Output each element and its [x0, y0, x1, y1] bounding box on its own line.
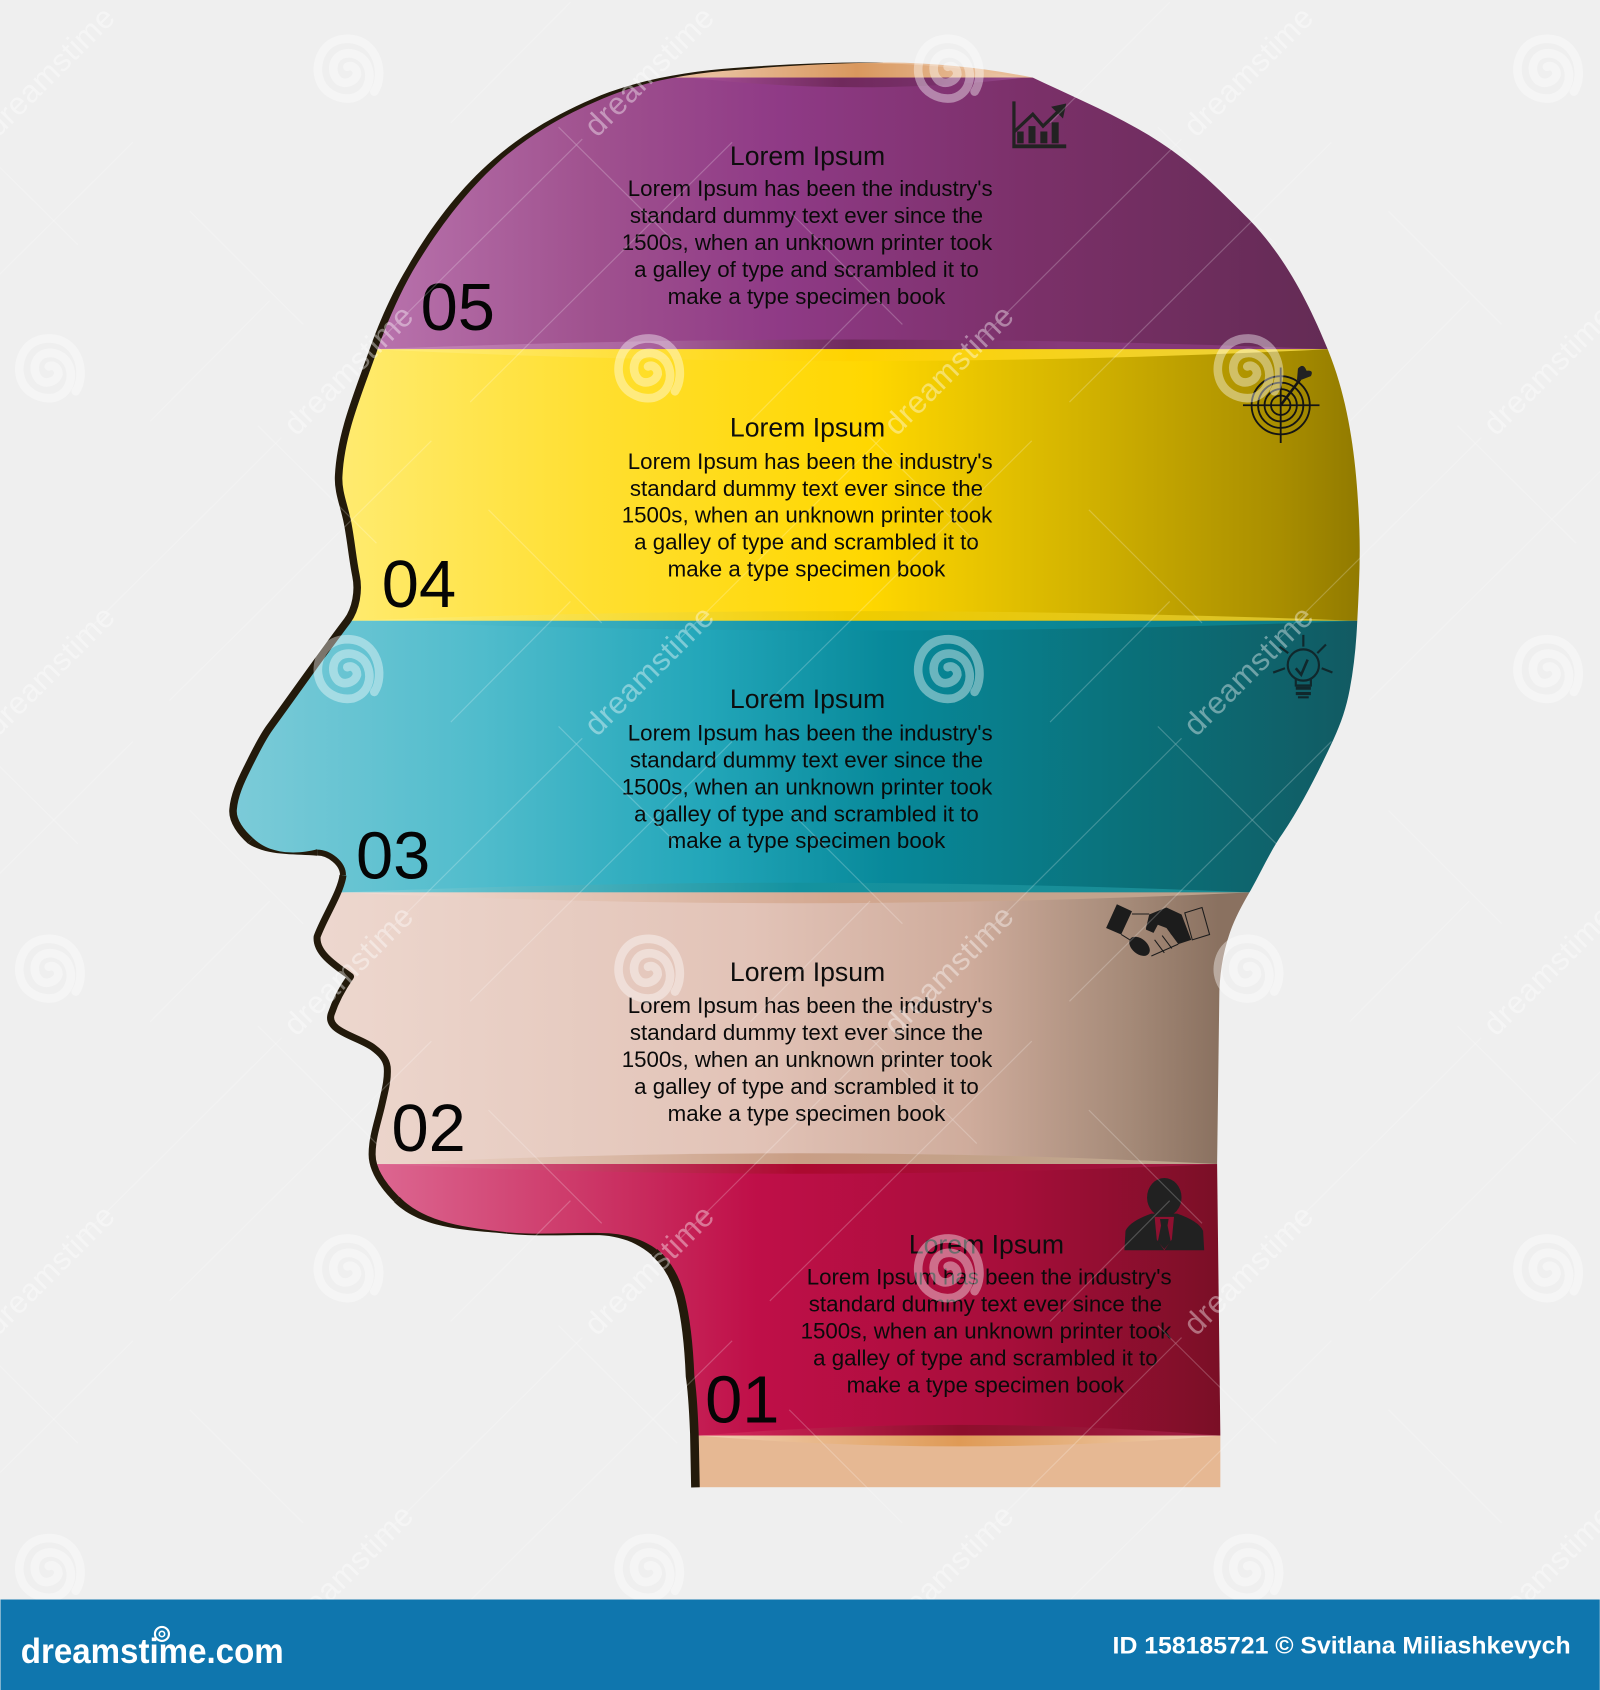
icon: businessman	[1124, 1178, 1204, 1250]
text block 04: standard dummy text ever since the	[630, 476, 983, 501]
footer bar	[0, 1599, 1600, 1690]
heading 02: Lorem Ipsum	[730, 957, 885, 987]
heading 03: Lorem Ipsum	[730, 684, 885, 714]
text block 02: standard dummy text ever since the	[630, 1020, 983, 1045]
text block 03: Lorem Ipsum has been the industry's	[628, 720, 993, 745]
panel: 05 purple band	[367, 78, 1337, 349]
head infographic	[231, 54, 1364, 1487]
icon: light bulb with check	[1273, 635, 1332, 698]
text block 04	[622, 449, 993, 582]
watermark layer: dreamstime	[577, 0, 721, 143]
text block 03	[622, 720, 993, 853]
watermark layer: dreamstime	[277, 298, 421, 442]
panel: 03 teal band	[231, 621, 1363, 893]
text block 03: 1500s, when an unknown printer took	[622, 774, 993, 799]
watermark layer: dreamstime	[877, 1497, 1021, 1641]
text block 01: standard dummy text ever since the	[809, 1292, 1162, 1317]
text block 02: make a type specimen book	[668, 1101, 946, 1126]
watermark layer: dreamstime	[577, 599, 721, 743]
watermark layer: dreamstime	[1176, 1198, 1320, 1342]
icon: target with dart	[1243, 366, 1320, 443]
head crown: tan strip	[674, 62, 1036, 79]
text block 01: 1500s, when an unknown printer took	[801, 1319, 1172, 1344]
text block 02: Lorem Ipsum has been the industry's	[628, 993, 993, 1018]
text block 01	[801, 1265, 1172, 1398]
text block 05: 1500s, when an unknown printer took	[622, 230, 993, 255]
text block 05	[622, 176, 993, 309]
text block 03: make a type specimen book	[668, 828, 946, 853]
text block 04: make a type specimen book	[668, 557, 946, 582]
head outline stroke	[233, 62, 884, 1487]
text block 02	[622, 993, 993, 1126]
watermark layer: dreamstime	[877, 898, 1021, 1042]
text block 01: make a type specimen book	[847, 1373, 1125, 1398]
text block 03: a galley of type and scrambled it to	[634, 801, 979, 826]
number 01: 01	[705, 1364, 779, 1438]
watermark layer: dreamstime	[277, 898, 421, 1042]
text block 04: a galley of type and scrambled it to	[634, 530, 979, 555]
text block 01: a galley of type and scrambled it to	[813, 1346, 1158, 1371]
text block 05: Lorem Ipsum has been the industry's	[628, 176, 993, 201]
heading 04: Lorem Ipsum	[730, 413, 885, 443]
number 02: 02	[392, 1092, 466, 1166]
text block 04: 1500s, when an unknown printer took	[622, 503, 993, 528]
text block 05: make a type specimen book	[668, 284, 946, 309]
footer logo: dreamstime.com	[21, 1631, 284, 1671]
watermark layer: dreamstime	[277, 1497, 421, 1641]
text block 05: a galley of type and scrambled it to	[634, 257, 979, 282]
watermark layer: dreamstime	[877, 298, 1021, 442]
text block 04: Lorem Ipsum has been the industry's	[628, 449, 993, 474]
watermark layer: dreamstime	[1176, 599, 1320, 743]
number 04: 04	[382, 548, 456, 622]
text block 01: Lorem Ipsum has been the industry's	[807, 1265, 1172, 1290]
panel: tan neck base	[695, 1436, 1224, 1487]
watermark layer: dreamstime	[577, 1198, 721, 1342]
watermark layer: dreamstime	[1176, 0, 1320, 143]
heading 05: Lorem Ipsum	[730, 141, 885, 171]
number 03: 03	[356, 819, 430, 893]
text block 02: 1500s, when an unknown printer took	[622, 1047, 993, 1072]
icon: growth chart	[1012, 101, 1066, 148]
icon: handshake	[1106, 904, 1210, 960]
text block 05: standard dummy text ever since the	[630, 203, 983, 228]
panel: 02 beige band	[313, 892, 1256, 1166]
text block 03: standard dummy text ever since the	[630, 747, 983, 772]
footer credit: ID 158185721 © Svitlana Miliashkevych	[1113, 1633, 1571, 1659]
heading 01: Lorem Ipsum	[909, 1229, 1064, 1259]
text block 02: a galley of type and scrambled it to	[634, 1074, 979, 1099]
panel: 04 yellow band	[334, 349, 1364, 622]
panel: 01 crimson band	[372, 1164, 1224, 1438]
number 05: 05	[421, 271, 495, 345]
